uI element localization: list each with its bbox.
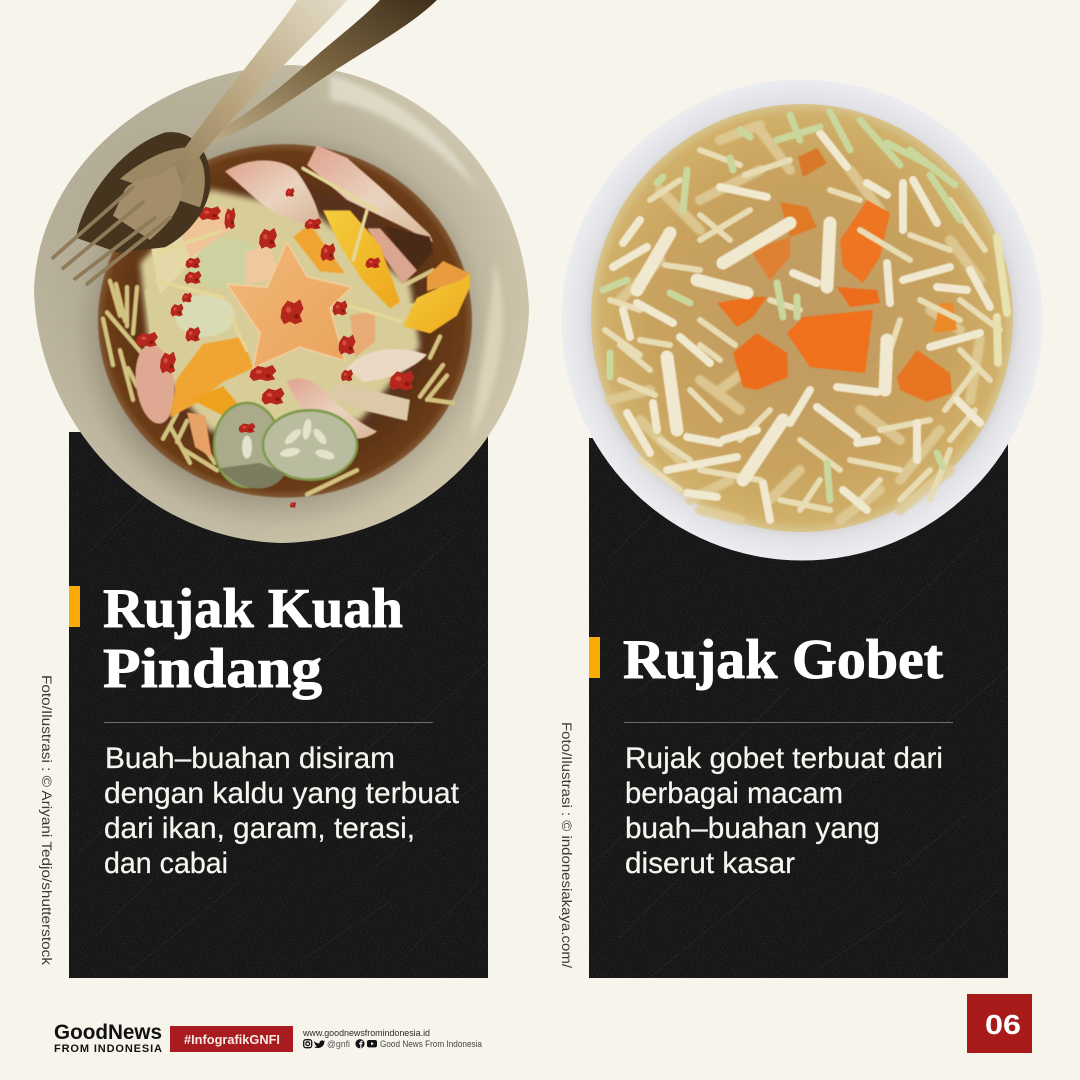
white bowl bbox=[562, 80, 1042, 560]
star fruit bbox=[227, 242, 352, 368]
logo: goodnews from indonesia bbox=[54, 1021, 162, 1055]
pale fruit bed bbox=[140, 189, 420, 431]
mango shreds bbox=[103, 270, 453, 494]
pale shreds bbox=[605, 133, 1007, 520]
cucumber slices bbox=[214, 403, 357, 489]
food group bbox=[53, 0, 472, 508]
fork bbox=[53, 0, 347, 284]
mango pieces bbox=[170, 210, 470, 458]
orange papaya chunks bbox=[717, 148, 957, 402]
pink fruit slices bbox=[131, 145, 433, 439]
title: rujak kuah pindang: Pindang bbox=[103, 638, 322, 700]
icon: twitter bbox=[314, 1040, 325, 1048]
description: rujak kuah pindang bbox=[104, 742, 460, 880]
icon: youtube bbox=[367, 1040, 377, 1047]
thin shreds over fruit bbox=[157, 168, 400, 350]
photo credit: right: Foto/Ilustrasi : © indonesiakaya.com/ bbox=[559, 722, 574, 968]
panel: rujak gobet bbox=[589, 438, 1008, 978]
title: rujak kuah pindang bbox=[103, 578, 403, 700]
contact details and social icons: @gnfi bbox=[327, 1039, 350, 1049]
logo: goodnews from indonesia: GoodNews bbox=[54, 1021, 162, 1044]
page number badge bbox=[967, 994, 1032, 1053]
description: rujak gobet: buah–buahan yang bbox=[625, 812, 880, 845]
icon: facebook bbox=[355, 1039, 365, 1048]
contact details and social icons bbox=[302, 1028, 482, 1049]
description: rujak kuah pindang: dengan kaldu yang terbuat bbox=[104, 777, 460, 810]
title: rujak kuah pindang: Rujak Kuah bbox=[103, 578, 403, 640]
accent bar: left title bbox=[69, 586, 80, 627]
logo: goodnews from indonesia: FROM INDONESIA bbox=[54, 1043, 162, 1055]
spoon bbox=[76, 0, 437, 252]
title: rujak gobet: Rujak Gobet bbox=[623, 629, 943, 691]
page number badge: 06 bbox=[985, 1009, 1021, 1040]
icon: instagram bbox=[304, 1040, 312, 1048]
pale green slices bbox=[150, 205, 280, 337]
hashtag badge: #InfografikGNFI bbox=[184, 1032, 280, 1047]
panel: rujak kuah pindang bbox=[69, 432, 488, 978]
bowl photo: rujak gobet bbox=[562, 80, 1042, 560]
chili flakes bbox=[136, 188, 414, 508]
plate highlights bbox=[330, 75, 503, 440]
green shreds bbox=[603, 112, 960, 500]
broth bbox=[591, 104, 1013, 532]
description: rujak gobet: diserut kasar bbox=[625, 847, 795, 880]
description: rujak gobet: berbagai macam bbox=[625, 777, 843, 810]
description: rujak kuah pindang: dari ikan, garam, terasi, bbox=[104, 812, 415, 845]
contact details and social icons: Good News From Indonesia bbox=[380, 1039, 482, 1049]
photo credit: left: Foto/Ilustrasi : © Ariyani Tedjo/shutterstock bbox=[39, 675, 54, 965]
description: rujak gobet: Rujak gobet terbuat dari bbox=[625, 742, 943, 775]
plate rim bbox=[34, 65, 529, 543]
description: rujak gobet bbox=[625, 742, 943, 880]
broth bbox=[98, 144, 472, 498]
accent bar: right title bbox=[589, 637, 600, 678]
description: rujak kuah pindang: dan cabai bbox=[104, 847, 228, 880]
hashtag badge bbox=[170, 1026, 293, 1052]
contact details and social icons: www.goodnewsfromindonesia.id bbox=[302, 1028, 430, 1038]
description: rujak kuah pindang: Buah–buahan disiram bbox=[105, 742, 395, 775]
shredded fruit base layer bbox=[610, 125, 980, 520]
bowl photo: rujak kuah pindang bbox=[34, 0, 529, 543]
